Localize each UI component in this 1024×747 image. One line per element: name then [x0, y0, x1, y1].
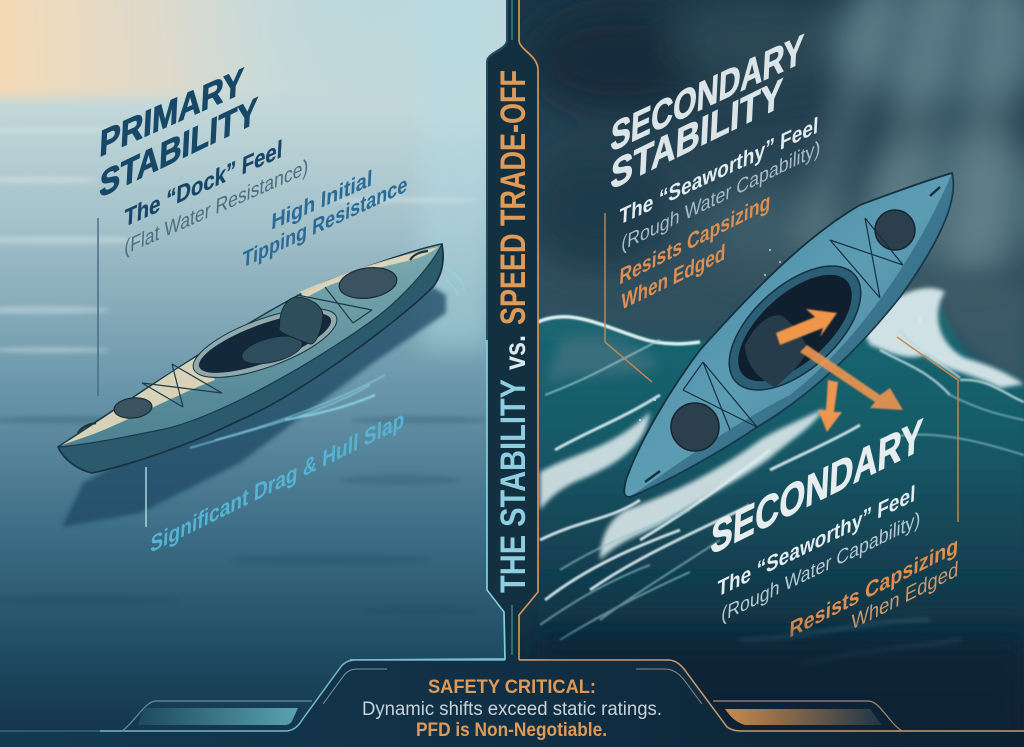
- heading: primary stability: PRIMARY: [99, 60, 245, 166]
- cockpit: [707, 243, 883, 413]
- foam along the left crest: [538, 317, 700, 344]
- heading: secondary stability: SECONDARY: [610, 25, 805, 162]
- text: lower rough water capability: (Rough Water Capability): [721, 507, 921, 627]
- title: speed trade-off: SPEED TRADE-OFF: [494, 70, 533, 325]
- title: vs: vs.: [499, 335, 532, 370]
- cockpit: [185, 294, 345, 392]
- heading: secondary lower: SECONDARY: [709, 409, 924, 566]
- safety heading: SAFETY CRITICAL:: [428, 677, 596, 698]
- bungee cords: [142, 287, 372, 407]
- safety message: [362, 677, 662, 741]
- callout line: drag: [145, 467, 147, 527]
- safety emphasis: PFD is Non-Negotiable.: [416, 720, 607, 741]
- heading: secondary stability: STABILITY: [610, 70, 784, 200]
- hatches: [113, 264, 399, 420]
- center vertical title: [494, 70, 533, 593]
- footer panel: [0, 640, 1024, 747]
- text: seaworthy feel: The “Seaworthy” Feel: [619, 112, 819, 230]
- callout lines: orange: [605, 213, 958, 522]
- footer right bar: [725, 709, 882, 725]
- text: high initial tipping resistance: Tipping Resistance: [242, 171, 408, 273]
- text: lower when edged: When Edged: [851, 556, 959, 635]
- waves: [538, 249, 1024, 665]
- text: high initial tipping resistance: High Initial: [271, 165, 373, 235]
- bungee cords: [683, 218, 903, 430]
- kayak: storm water: [624, 173, 953, 497]
- kayak: calm water: [58, 244, 446, 527]
- text: lower resists capsizing: Resists Capsizing: [789, 533, 959, 644]
- text: resists capsizing when edged: When Edged: [621, 239, 726, 315]
- wake ripple: [190, 268, 465, 448]
- foam along hull: [600, 408, 825, 560]
- text: resists capsizing when edged: [619, 189, 771, 315]
- panel: storm water background: [512, 0, 1024, 747]
- center divider column: [350, 0, 670, 660]
- callout line: primary: [97, 218, 99, 396]
- text: the dock feel: The “Dock” Feel: [124, 135, 283, 233]
- safety body: Dynamic shifts exceed static ratings.: [362, 699, 662, 720]
- title: the stability: THE STABILITY: [494, 379, 533, 593]
- foam crest right: [860, 288, 1024, 388]
- text: flat water resistance: (Flat Water Resistance): [124, 154, 309, 260]
- text: lower seaworthy feel: The “Seaworthy” Feel: [717, 480, 916, 602]
- footer left bar: [138, 708, 298, 725]
- text: resists capsizing when edged: Resists Capsizing: [619, 189, 771, 291]
- heading: primary stability: STABILITY: [99, 90, 259, 207]
- hatches: [671, 210, 915, 451]
- text: rough water capability: (Rough Water Capability): [621, 136, 821, 256]
- force arrows: [776, 309, 903, 432]
- panel: calm water background: [0, 0, 512, 747]
- text: significant drag and hull slap: Significant Drag & Hull Slap: [150, 406, 405, 559]
